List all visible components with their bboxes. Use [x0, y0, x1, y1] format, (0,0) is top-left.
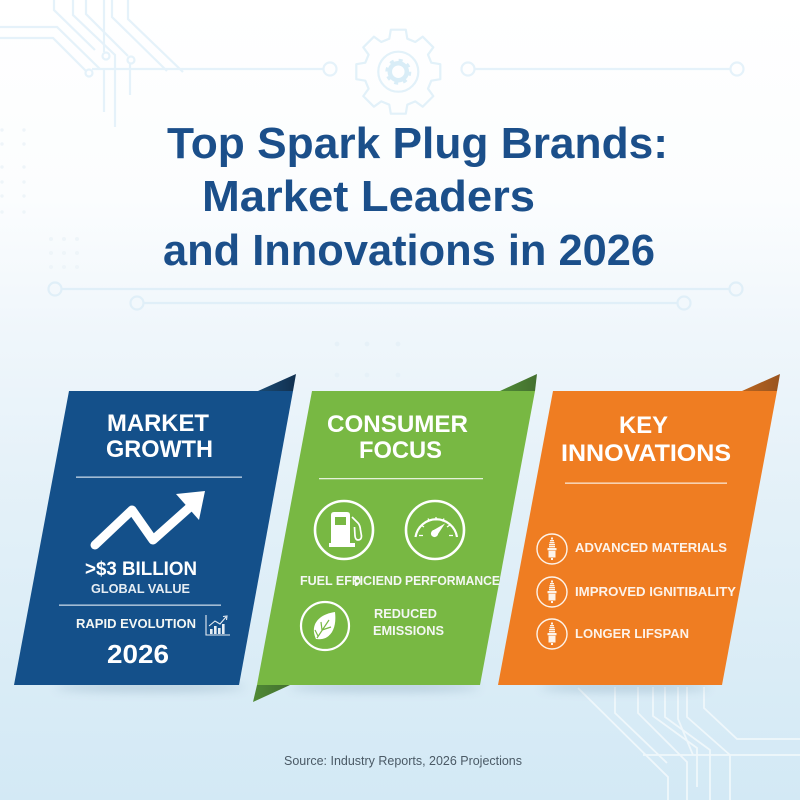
title	[163, 119, 668, 275]
icon: gear	[356, 30, 440, 114]
icon: spark plug	[537, 534, 567, 564]
title: Top Spark Plug Brands:	[167, 119, 668, 168]
circuit traces under title	[48, 282, 742, 310]
title: and Innovations in 2026	[163, 226, 655, 275]
heading: GROWTH	[106, 436, 213, 463]
icon: spark plug	[537, 619, 567, 649]
panel: consumer focus	[253, 374, 537, 702]
label: rapid evolution: RAPID EVOLUTION	[76, 616, 196, 631]
divider	[76, 476, 242, 478]
stat: global value	[85, 559, 197, 596]
label: reduced emissions: REDUCED	[374, 606, 437, 621]
divider	[565, 482, 727, 484]
icon: rising arrow	[95, 491, 205, 545]
label: IMPROVED IGNITIBALITY	[575, 584, 736, 599]
heading: FOCUS	[359, 437, 442, 464]
heading: INNOVATIONS	[561, 440, 731, 467]
heading: KEY	[619, 412, 668, 439]
circuit traces: bottom right	[578, 687, 800, 800]
stat: global value: >$3 BILLION	[85, 559, 197, 580]
label: ADVANCED MATERIALS	[575, 540, 727, 555]
panel shadows	[55, 683, 710, 691]
item: advanced materials	[537, 534, 727, 564]
heading: MARKET	[107, 410, 209, 437]
divider	[319, 478, 483, 479]
circuit traces: top left	[0, 0, 336, 127]
label: fuel efficiency and performance	[300, 573, 500, 588]
label: fuel efficiency and performance: PERFORMANCE	[405, 573, 500, 588]
decorative dots	[0, 128, 400, 377]
heading	[561, 412, 731, 467]
icon: fuel pump	[315, 501, 373, 559]
ribbon fold	[258, 374, 296, 391]
icon: spark plug	[537, 577, 567, 607]
icon: speedometer	[406, 501, 464, 559]
label: fuel efficiency and performance: FUEL EFFICIEND	[300, 573, 402, 588]
icon: bar chart	[206, 615, 230, 635]
stat: global value: GLOBAL VALUE	[91, 581, 190, 596]
label: LONGER LIFSPAN	[575, 626, 689, 641]
panel background	[257, 391, 535, 685]
title: Market Leaders	[202, 172, 535, 221]
year: 2026	[107, 639, 169, 669]
item: longer lifespan	[537, 619, 689, 649]
label: reduced emissions	[373, 606, 444, 638]
item: improved ignitibility	[537, 577, 736, 607]
panel background	[14, 391, 293, 685]
heading: CONSUMER	[327, 411, 468, 438]
label: reduced emissions: EMISSIONS	[373, 623, 444, 638]
heading	[106, 410, 213, 463]
source note: Source: Industry Reports, 2026 Projections	[284, 754, 522, 768]
divider	[59, 604, 221, 606]
circuit trace: top right	[462, 62, 744, 76]
panel: market growth	[14, 374, 296, 685]
ribbon folds	[253, 374, 537, 702]
ribbon fold	[742, 374, 780, 391]
panel background	[498, 391, 777, 685]
heading	[327, 411, 468, 464]
icon: leaf	[301, 602, 349, 650]
panel: key innovations	[498, 374, 780, 685]
